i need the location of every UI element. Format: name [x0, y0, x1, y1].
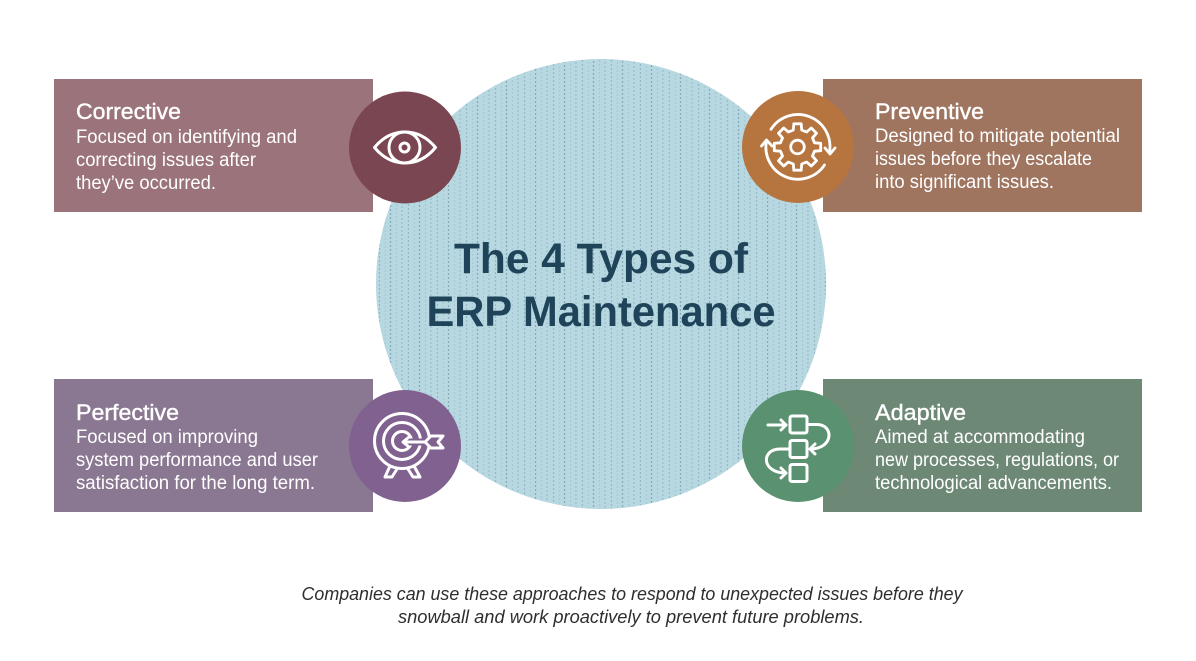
text: corrective description: correcting issues after [76, 150, 257, 171]
text: perfective description: satisfaction for the long term. [76, 473, 315, 494]
icon: eye [349, 92, 461, 204]
heading: perfective: Perfective [76, 400, 179, 425]
panel: perfective [54, 379, 373, 512]
footer note: Companies can use these approaches to respond to unexpected issues before they [302, 583, 964, 604]
title: The 4 Types of [454, 235, 749, 283]
heading: adaptive: Adaptive [875, 400, 966, 425]
panel: adaptive [823, 379, 1142, 512]
icon: gear with cycle arrows [742, 91, 854, 203]
central textured circle [376, 59, 826, 509]
panel: preventive [823, 79, 1142, 212]
panel: corrective [54, 79, 373, 212]
footer note [302, 583, 964, 627]
text: preventive description: into significant issues. [875, 172, 1054, 193]
text: corrective description: Focused on identifying and [76, 127, 297, 148]
icon: target with arrow [349, 390, 461, 502]
text: adaptive description: technological advancements. [875, 473, 1112, 494]
text: preventive description: Designed to mitigate potential [875, 126, 1120, 147]
icon: process flow [742, 390, 854, 502]
text: perfective description [76, 427, 319, 494]
text: corrective description [76, 127, 297, 194]
text: preventive description [875, 126, 1120, 193]
text: perfective description: system performance and user [76, 450, 319, 471]
text: preventive description: issues before they escalate [875, 149, 1092, 170]
title [426, 235, 776, 336]
text: adaptive description: new processes, regulations, or [875, 450, 1120, 471]
title: ERP Maintenance [426, 288, 776, 336]
heading: preventive: Preventive [875, 99, 984, 124]
footer note: snowball and work proactively to prevent future problems. [398, 606, 864, 627]
text: adaptive description [875, 427, 1120, 494]
text: perfective description: Focused on improving [76, 427, 258, 448]
text: corrective description: they’ve occurred. [76, 173, 216, 194]
heading: corrective: Corrective [76, 99, 181, 124]
text: adaptive description: Aimed at accommodating [875, 427, 1085, 448]
